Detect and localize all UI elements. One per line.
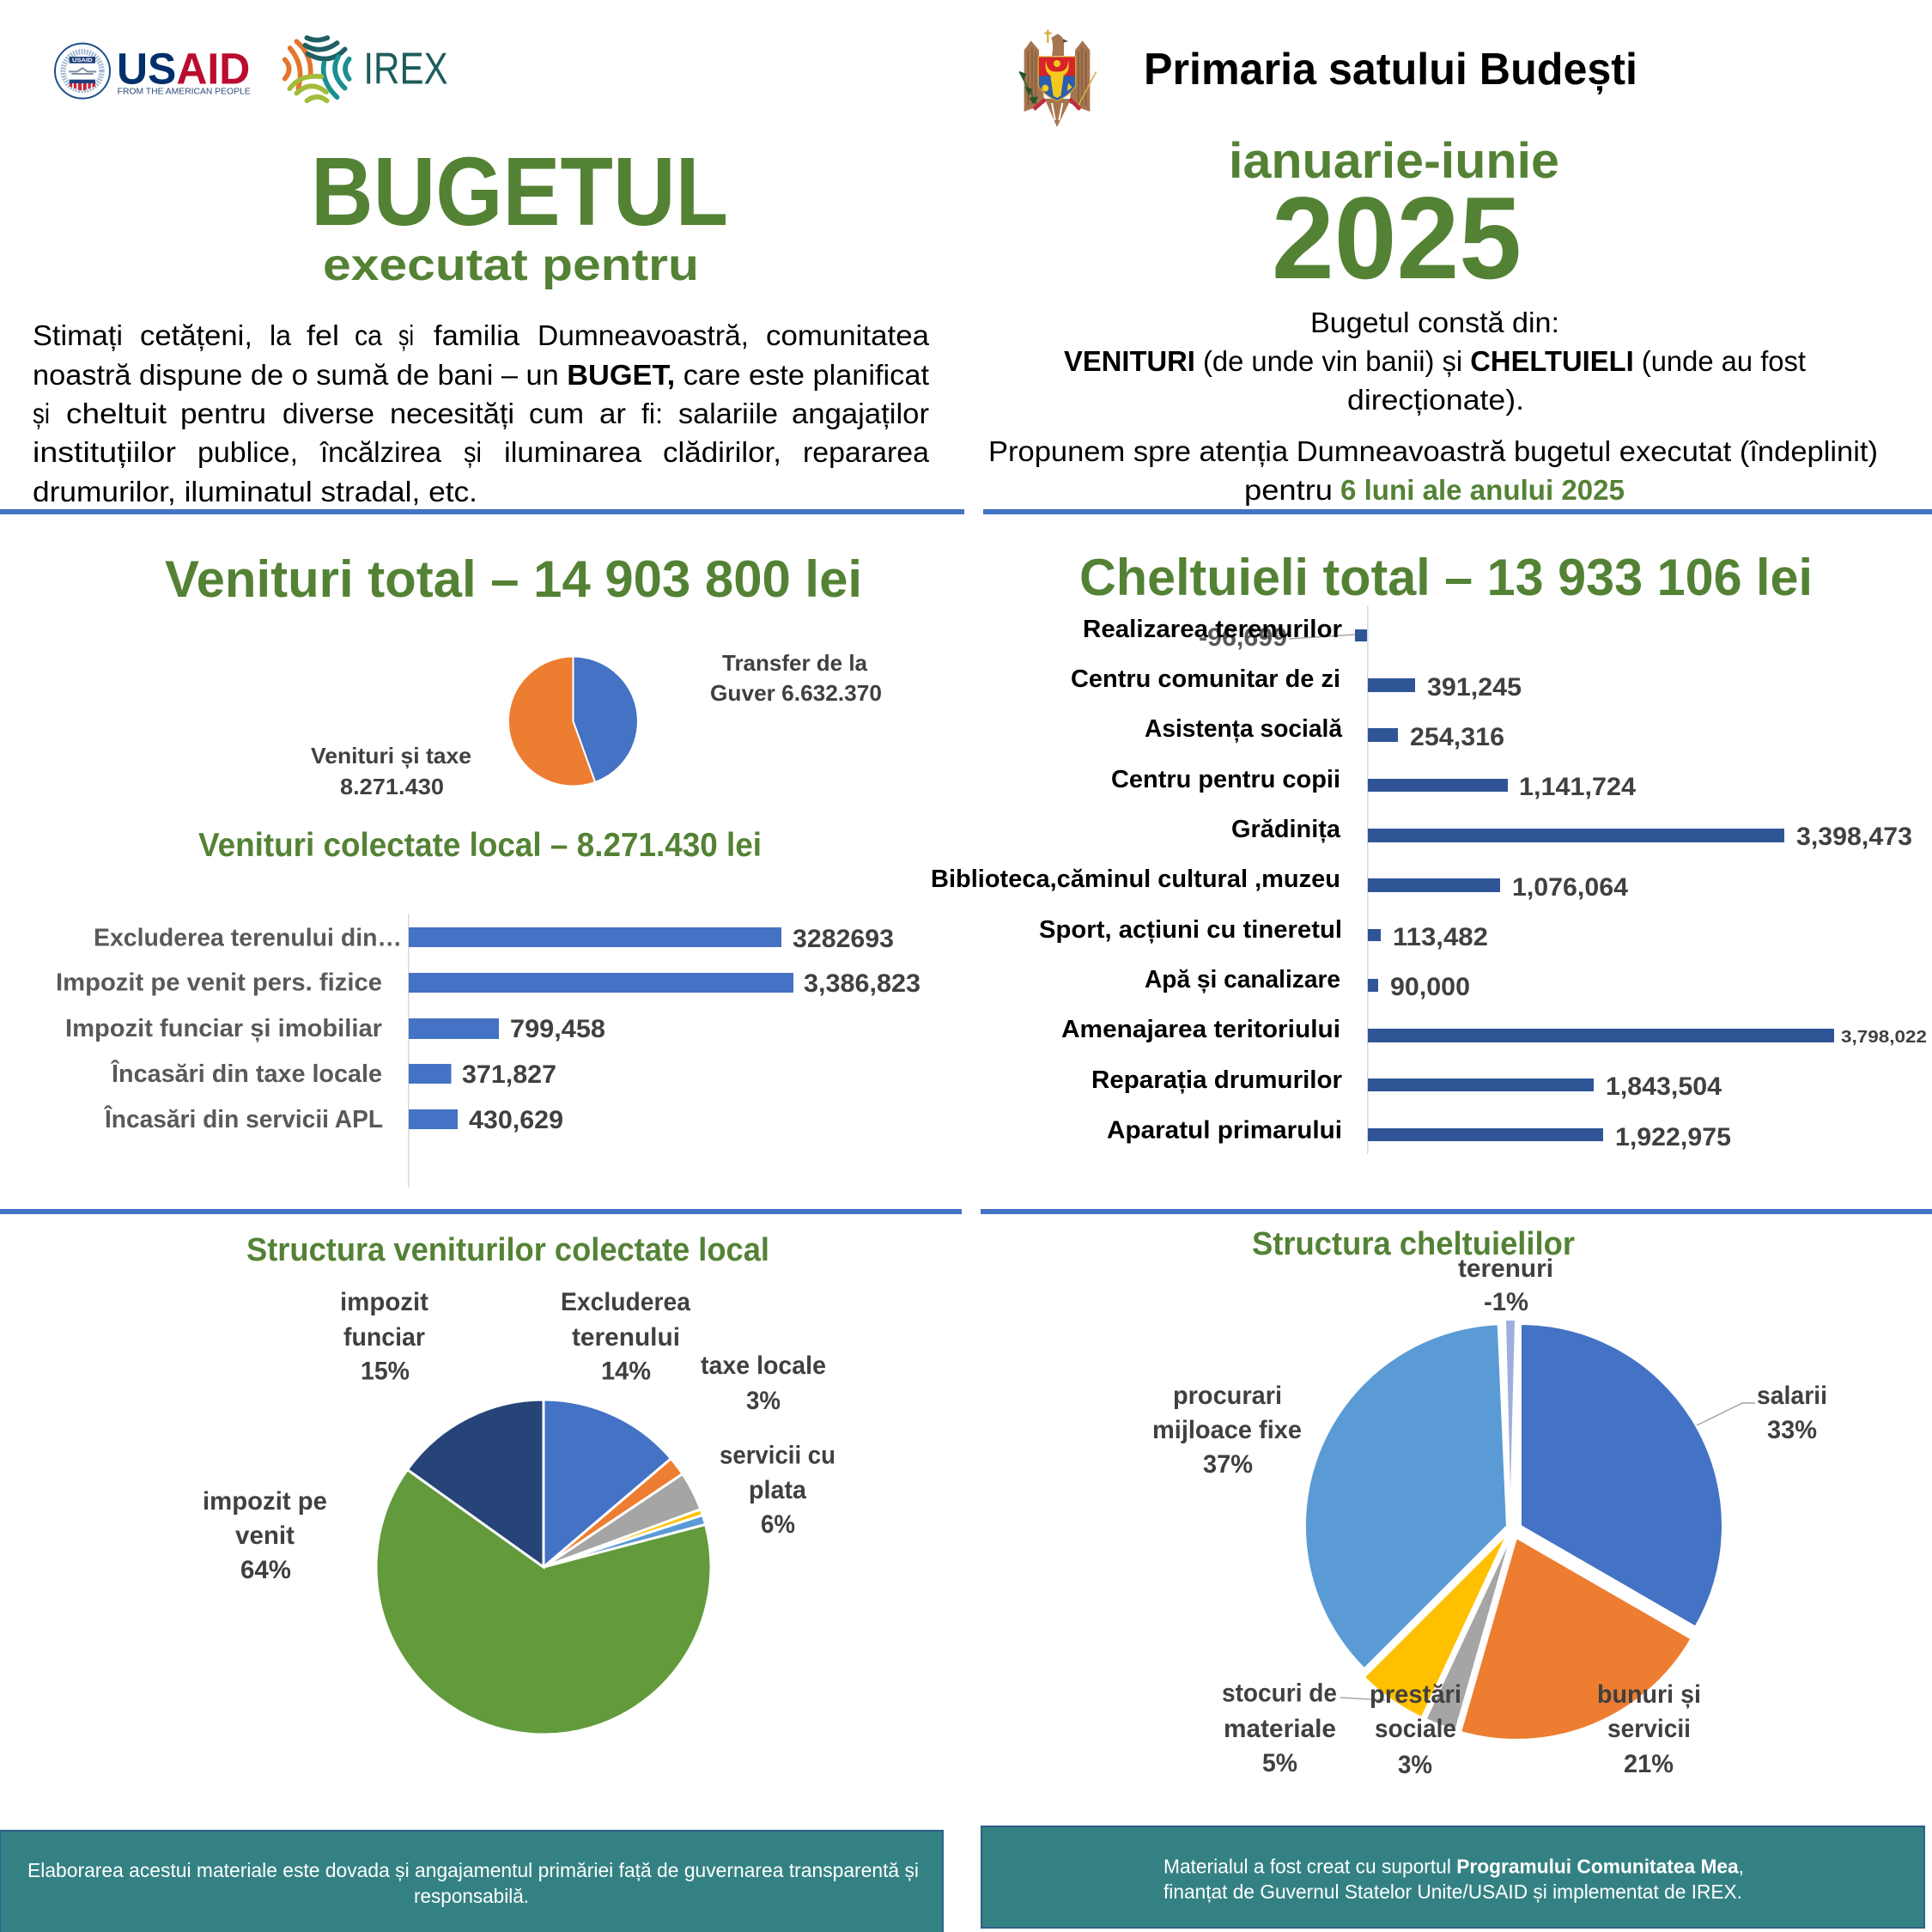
text block: budget explanation: direcționate).: [1347, 384, 1524, 416]
pie labels: expense structure: terenuri: [1458, 1255, 1553, 1283]
pie labels: local income structure: 3%: [746, 1387, 781, 1415]
heading: Structura veniturilor colectate local: Structura veniturilor colectate local: [246, 1232, 769, 1268]
text block: introduction: angajaților: [792, 398, 929, 429]
pie labels: expense structure: 3%: [1398, 1751, 1432, 1779]
bar values: [1199, 623, 1927, 1151]
label: venituri și taxe: 8.271.430: [340, 774, 444, 799]
text block: introduction: salariile: [678, 398, 778, 429]
text block: introduction: ca: [355, 319, 383, 351]
pie labels: expense structure: mijloace fixe: [1152, 1416, 1302, 1444]
bar values: 799,458: [510, 1015, 605, 1043]
subtitle: ianuarie-iunie: ianuarie-iunie: [1229, 133, 1559, 189]
pie labels: expense structure: 33%: [1767, 1416, 1817, 1444]
bar labels: Încasări din taxe locale: [110, 1059, 382, 1088]
bar labels: Impozit funciar și imobiliar: [65, 1015, 382, 1042]
text block: budget explanation: VENITURI (de unde vin banii) și CHELTUIELI (unde au fost: [1064, 345, 1806, 377]
bar labels: Sport, acțiuni cu tineretul: [1039, 916, 1342, 944]
bar values: 3282693: [793, 925, 894, 953]
text block: introduction: cetățeni,: [140, 319, 252, 351]
pie labels: local income structure: 64%: [240, 1556, 291, 1584]
logo: USAID: USAID: [72, 58, 93, 64]
footer: transparency note: Elaborarea acestui materiale este dovada și angajamentul primăriei față de guvernarea transparentă și: [27, 1859, 919, 1881]
text block: introduction: instituțiilor: [33, 436, 176, 468]
text block: introduction: fel: [307, 319, 339, 351]
bar labels: Încasări din servicii APL: [103, 1104, 383, 1133]
bar labels: Apă și canalizare: [1145, 966, 1340, 993]
text block: introduction: fi:: [641, 398, 663, 429]
bar values: 90,000: [1390, 973, 1470, 1001]
bar values: [462, 925, 920, 1134]
pie labels: local income structure: [203, 1288, 835, 1584]
bar labels: Asistența socială: [1145, 715, 1343, 743]
logo: USAID: [55, 44, 251, 99]
pie labels: local income structure: plata: [749, 1476, 806, 1504]
chart: local income structure pie: [376, 1400, 711, 1735]
bar values: -96,699: [1199, 623, 1287, 652]
text block: budget explanation: Propunem spre atenția Dumneavoastră bugetul executat (îndeplinit): [988, 435, 1878, 467]
pie labels: local income structure: terenului: [572, 1323, 680, 1352]
label: venituri și taxe: Venituri și taxe: [311, 743, 471, 769]
text block: budget explanation: 6 luni ale anului 2025: [1340, 474, 1625, 506]
chart: local income bars: [56, 914, 920, 1188]
text block: introduction: și: [398, 319, 414, 351]
label: transfer: Transfer de la: [722, 650, 868, 676]
text block: introduction: familia: [434, 319, 520, 351]
pie labels: local income structure: impozit: [340, 1288, 428, 1316]
logo: IREX: IREX: [363, 43, 448, 93]
pie labels: local income structure: 15%: [361, 1357, 410, 1386]
bar values: 3,386,823: [804, 969, 920, 998]
bar values: 1,076,064: [1512, 873, 1628, 902]
heading: Venituri colectate local: Venituri colectate local – 8.271.430 lei: [198, 827, 762, 864]
text block: introduction: Dumneavoastră,: [538, 319, 749, 351]
label: transfer: Guver 6.632.370: [710, 680, 882, 706]
pie labels: expense structure: stocuri de: [1222, 1680, 1337, 1708]
logo: USAID: USAID: [117, 44, 250, 93]
text block: introduction: pentru: [180, 398, 266, 429]
bar labels: Aparatul primarului: [1107, 1116, 1342, 1144]
bar values: 371,827: [462, 1060, 556, 1089]
heading: Primaria satului Budești: Primaria satului Budești: [1144, 45, 1637, 94]
bar values: 391,245: [1427, 673, 1522, 702]
chart: expense structure pie: [1305, 1320, 1722, 1740]
text block: introduction: la: [270, 319, 292, 351]
text block: budget explanation: Bugetul constă din:: [1310, 307, 1559, 338]
bar labels: [931, 616, 1343, 1144]
bar values: 254,316: [1410, 723, 1504, 751]
bar labels: Realizarea terenurilor: [1083, 616, 1342, 643]
logo: IREX: [285, 38, 448, 100]
footer: program support note: [981, 1826, 1924, 1928]
text block: introduction: iluminarea: [504, 436, 642, 468]
pie labels: local income structure: 14%: [601, 1357, 651, 1386]
bar labels: Centru pentru copii: [1111, 766, 1340, 793]
pie labels: expense structure: 21%: [1624, 1750, 1674, 1778]
text block: introduction: cum: [529, 398, 584, 429]
bar values: 3,398,473: [1796, 823, 1912, 851]
title: 2025: 2025: [1272, 173, 1522, 303]
text block: introduction: drumurilor, iluminatul stradal, etc.: [33, 476, 477, 507]
text block: introduction: cheltuit: [66, 398, 167, 429]
pie labels: expense structure: salarii: [1757, 1382, 1827, 1410]
text block: introduction: diverse: [283, 398, 374, 429]
bar labels: Centru comunitar de zi: [1071, 665, 1340, 693]
text block: introduction: repararea: [803, 436, 930, 468]
pie labels: local income structure: venit: [235, 1522, 295, 1550]
chart: expense bars: [931, 605, 1927, 1154]
text block: introduction: ar: [599, 398, 626, 429]
pie labels: local income structure: funciar: [343, 1323, 425, 1352]
footer: program support note: finanțat de Guvernul Statelor Unite/USAID și implementat de IREX.: [1163, 1880, 1742, 1903]
text block: budget explanation: pentru: [1244, 474, 1333, 506]
heading: Venituri total: Venituri total – 14 903 800 lei: [165, 550, 862, 608]
emblem: coat of arms of Moldova: [1019, 30, 1097, 127]
bar values: 113,482: [1393, 923, 1488, 951]
bar values: 1,922,975: [1615, 1123, 1731, 1151]
footer: transparency note: responsabilă.: [414, 1885, 529, 1907]
pie labels: local income structure: taxe locale: [701, 1352, 826, 1380]
bar labels: Reparația drumurilor: [1091, 1066, 1342, 1094]
text block: introduction: necesități: [390, 398, 514, 429]
title: BUGETUL: BUGETUL: [311, 137, 728, 246]
heading: Structura cheltuielilor: Structura cheltuielilor: [1252, 1226, 1575, 1262]
pie labels: expense structure: -1%: [1484, 1288, 1528, 1316]
logo: USAID: FROM THE AMERICAN PEOPLE: [118, 87, 251, 96]
pie labels: expense structure: bunuri și: [1597, 1680, 1701, 1709]
label: transfer: [710, 650, 882, 706]
text block: introduction: clădirilor,: [663, 436, 781, 468]
bar values: 1,843,504: [1606, 1072, 1722, 1101]
text block: budget explanation: [988, 307, 1878, 506]
text block: introduction: Stimați: [33, 319, 123, 351]
pie labels: expense structure: sociale: [1375, 1715, 1456, 1743]
bar values: 1,141,724: [1519, 773, 1636, 801]
pie labels: local income structure: servicii cu: [720, 1442, 835, 1470]
footer: program support note: Materialul a fost creat cu suportul Programului Comunitatea Mea,: [1163, 1856, 1744, 1878]
text block: introduction: încălzirea: [319, 436, 442, 468]
chart: income pie: [311, 650, 882, 799]
subtitle: executat pentru: executat pentru: [323, 240, 699, 290]
bar labels: Impozit pe venit pers. fizice: [56, 969, 382, 996]
pie labels: expense structure: servicii: [1607, 1715, 1691, 1743]
label: venituri și taxe: [311, 743, 471, 799]
text block: introduction: noastră dispune de o sumă de bani – un BUGET, care este planificat: [33, 359, 929, 391]
pie labels: expense structure: materiale: [1224, 1715, 1336, 1743]
pie labels: expense structure: 37%: [1203, 1450, 1253, 1479]
pie labels: local income structure: impozit pe: [203, 1487, 327, 1516]
text block: introduction: [33, 319, 930, 507]
bar labels: Grădinița: [1231, 816, 1341, 843]
text block: introduction: și: [464, 436, 482, 468]
footer: transparency note: [0, 1831, 943, 1932]
pie labels: expense structure: prestări: [1370, 1680, 1461, 1709]
pie labels: expense structure: procurari: [1173, 1382, 1282, 1410]
pie labels: expense structure: [1152, 1255, 1827, 1779]
pie labels: local income structure: Excluderea: [561, 1288, 690, 1316]
pie labels: local income structure: 6%: [761, 1510, 795, 1539]
bar values: 430,629: [469, 1106, 563, 1134]
bar labels: Amenajarea teritoriului: [1061, 1016, 1340, 1043]
text block: introduction: comunitatea: [766, 319, 930, 351]
pie labels: expense structure: 5%: [1262, 1749, 1297, 1777]
text block: introduction: publice,: [197, 436, 298, 468]
heading: Cheltuieli total: Cheltuieli total – 13 933 106 lei: [1079, 549, 1813, 606]
text block: introduction: și: [33, 398, 50, 429]
bar values: 3,798,022: [1841, 1028, 1927, 1047]
bar labels: [56, 924, 402, 1133]
bar labels: Biblioteca,căminul cultural ,muzeu: [931, 866, 1340, 893]
bar labels: Excluderea terenului din…: [94, 924, 402, 951]
